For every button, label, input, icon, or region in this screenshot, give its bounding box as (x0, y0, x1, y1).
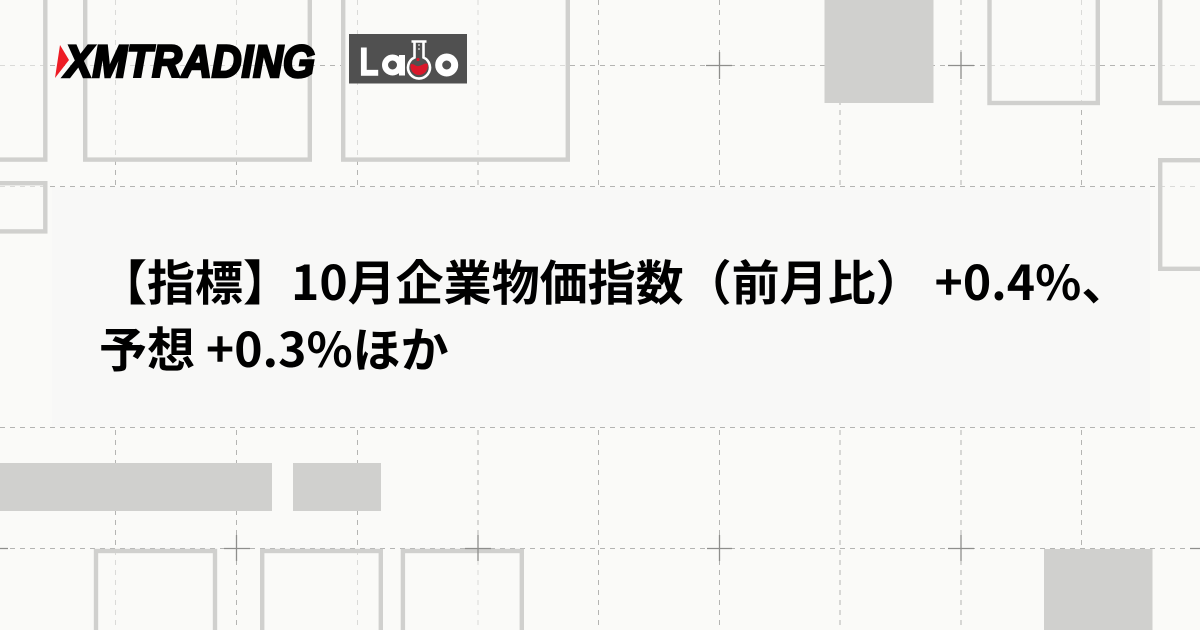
logo: XMTRADING (55, 36, 316, 87)
title (99, 244, 1129, 381)
logo: Lab (349, 34, 467, 84)
bottom boxes (96, 551, 522, 630)
logo letters: L (360, 41, 378, 84)
top left boxes (0, 0, 568, 231)
title: 予想 +0.3%ほか (99, 311, 449, 381)
icon: red triangle (55, 45, 69, 78)
title: 【指標】10月企業物価指数（前月比） +0.4%、 (99, 244, 1129, 314)
top right boxes (990, 0, 1200, 269)
icon: flask (408, 42, 430, 79)
